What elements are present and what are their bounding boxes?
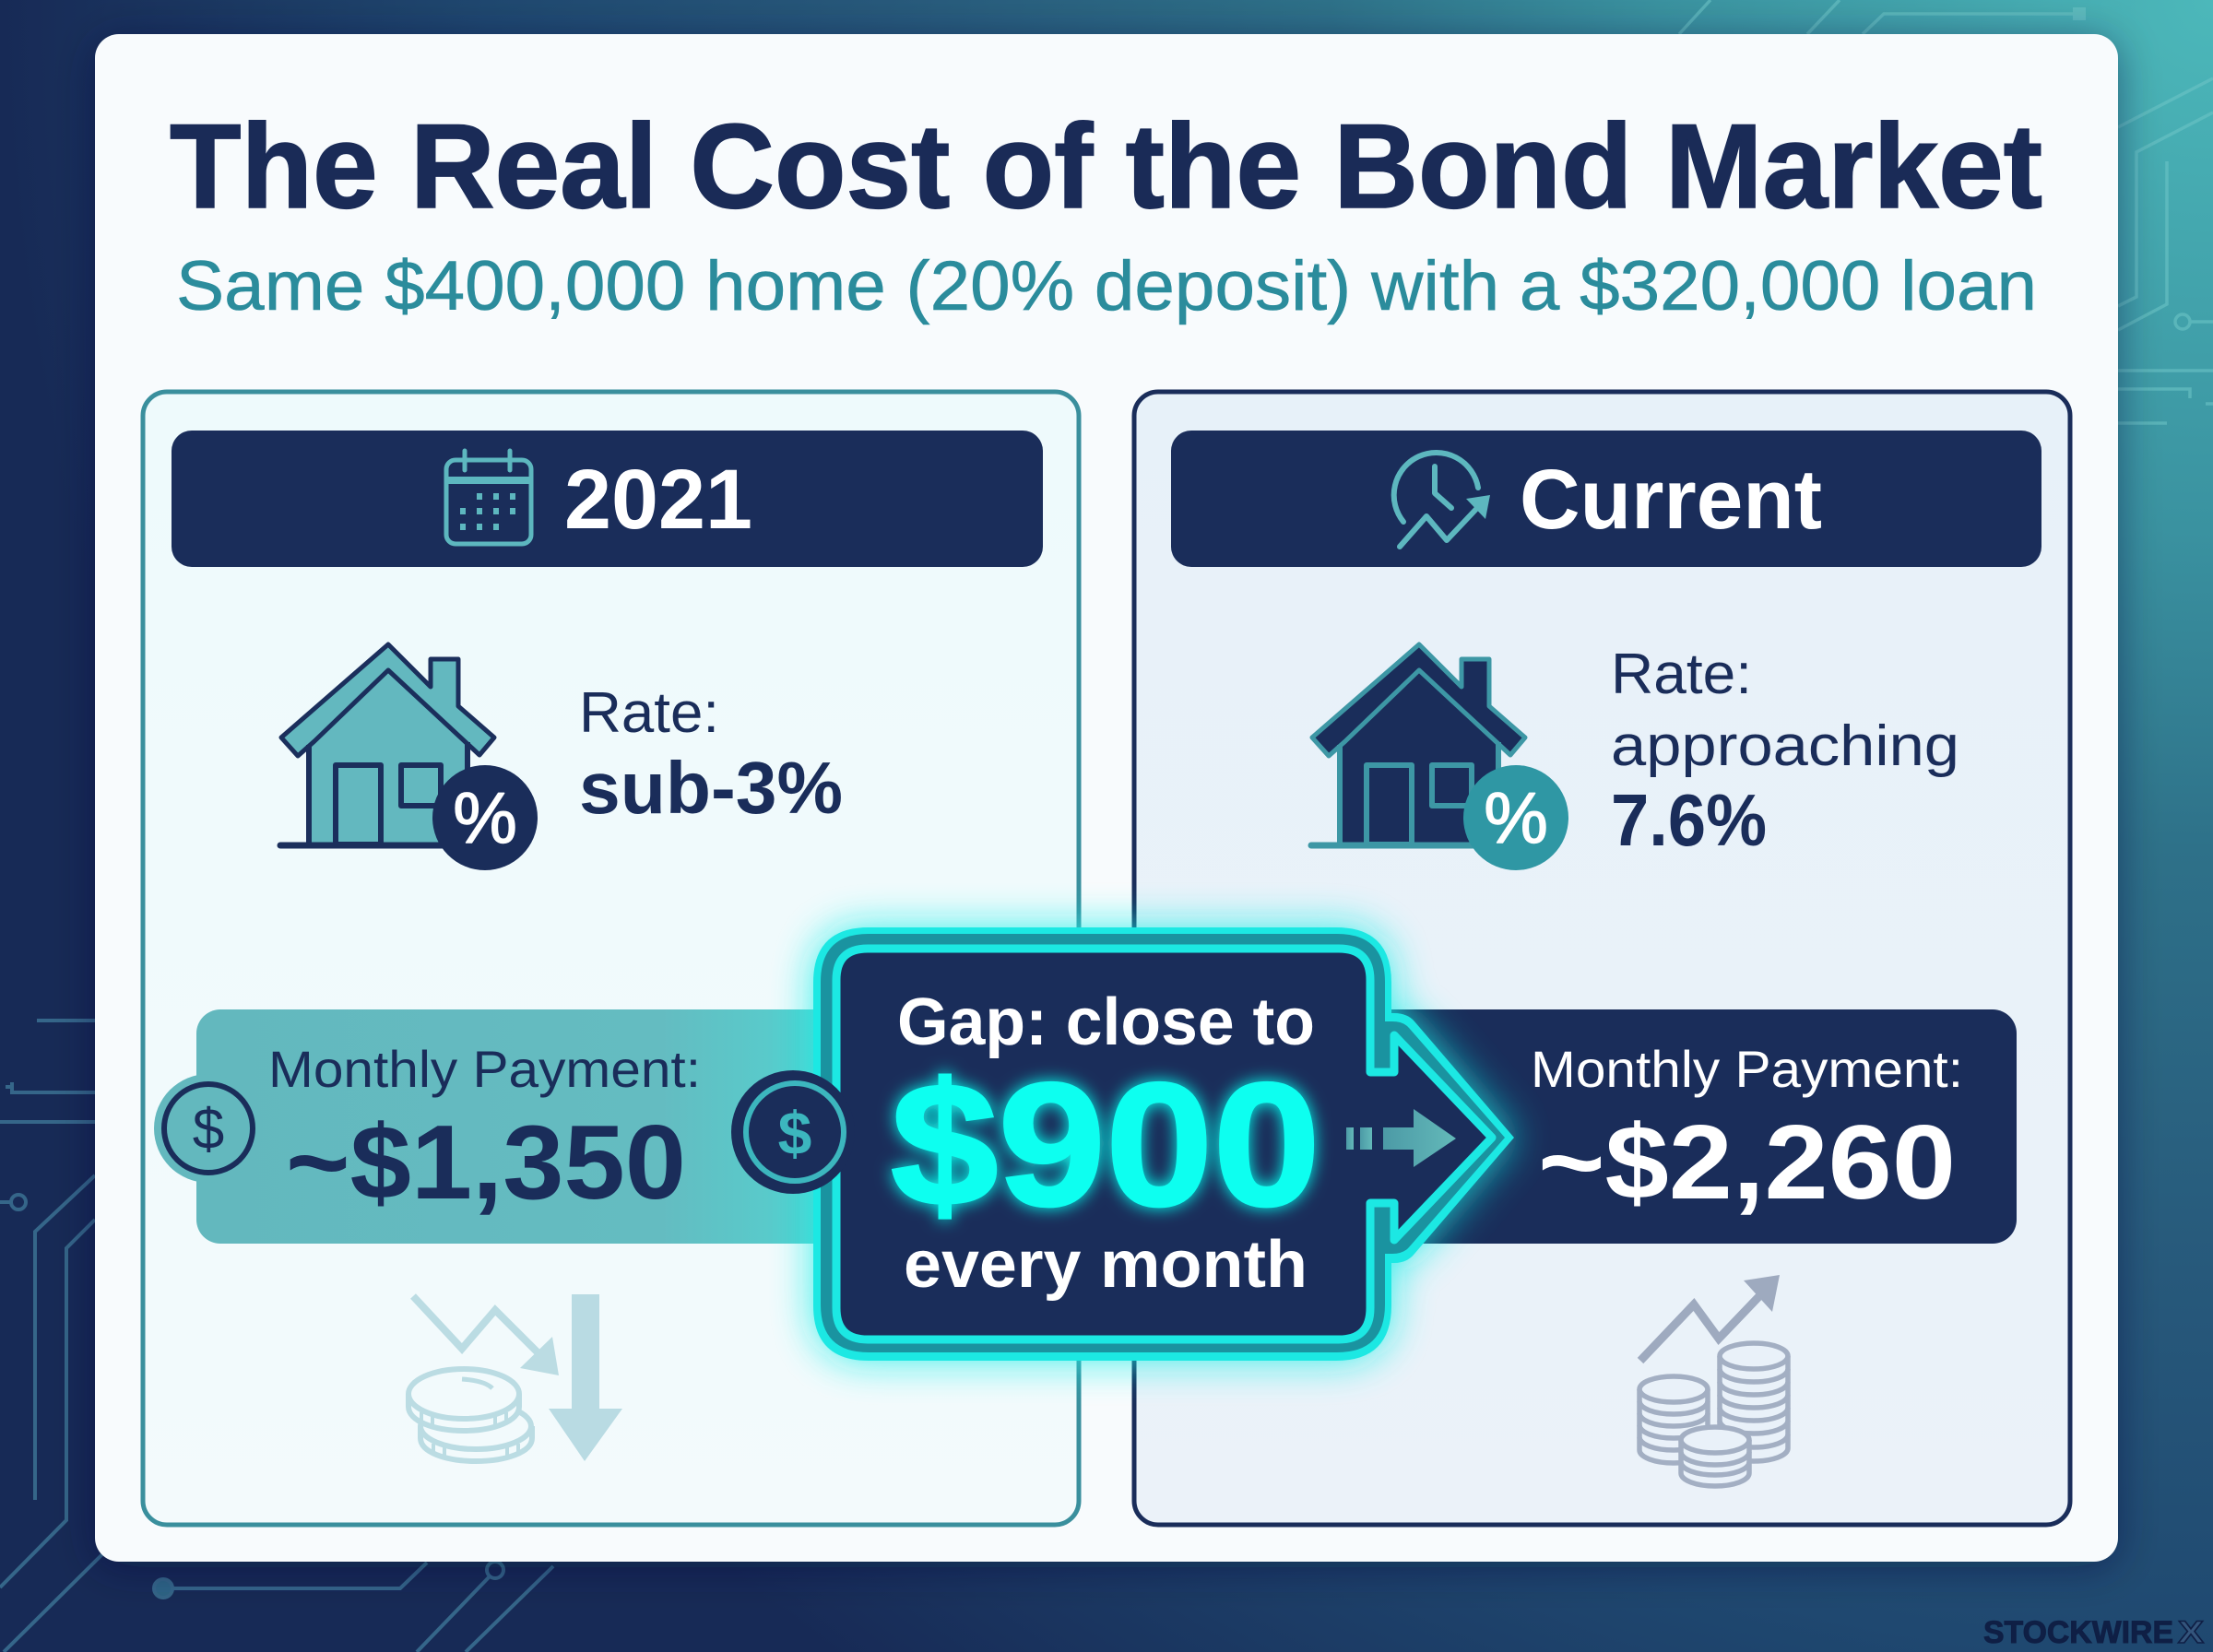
callout footer: every month (904, 1228, 1308, 1302)
rate label Current: Rate: (1611, 643, 1752, 706)
panel: Current (1134, 392, 2070, 1525)
rate value Current: 7.6% (1611, 779, 1767, 861)
callout outer frame (813, 927, 1514, 1361)
rate descriptor Current: approaching (1611, 714, 1959, 778)
rate label 2021: Rate: (579, 681, 719, 745)
callout inner fill (836, 949, 1492, 1339)
watermark (1983, 1615, 2204, 1650)
payment label 2021: Monthly Payment: (268, 1040, 701, 1098)
circuit pattern: top and right (1679, 0, 2213, 423)
icon: house with percent badge: % (453, 777, 517, 858)
icon: dollar tag: $ (193, 1098, 224, 1162)
icon: falling coins (408, 1294, 622, 1461)
payment bar 2021 (196, 1009, 860, 1244)
title: The Real Cost of the Bond Market (170, 99, 2042, 233)
callout amount: $900 (891, 1047, 1320, 1243)
circuit pattern: left and bottom (0, 1021, 553, 1652)
icon: clock with rising arrow (1394, 453, 1490, 547)
icon: rising coin stacks (1639, 1275, 1788, 1486)
icon: dollar tag (154, 1074, 263, 1183)
panel background 2021 (143, 392, 1079, 1525)
icon: house with percent badge (1311, 644, 1568, 870)
icon: dollar coin: $ (778, 1099, 811, 1167)
rate value 2021: sub-3% (579, 747, 843, 829)
header label Current: Current (1520, 453, 1822, 547)
watermark wordmark: STOCKWIRE (1983, 1615, 2173, 1650)
payment value Current: ~$2,260 (1538, 1104, 1956, 1221)
icon: calendar (446, 451, 531, 544)
payment bar Current (1365, 1009, 2017, 1244)
callout: gap arrow box (731, 927, 1514, 1361)
subtitle: Same $400,000 home (20% deposit) with a $320,000 loan (176, 247, 2037, 325)
panel background Current (1134, 392, 2070, 1525)
watermark X mark: X (2178, 1615, 2204, 1650)
icon: dollar coin (731, 1070, 855, 1194)
header bar 2021 (172, 431, 1043, 567)
header bar Current (1171, 431, 2041, 567)
payment label Current: Monthly Payment: (1531, 1040, 1963, 1098)
payment value 2021: ~$1,350 (286, 1104, 686, 1221)
callout heading: Gap: close to (897, 985, 1315, 1059)
callout middle frame (821, 934, 1505, 1352)
icon: house with percent badge (280, 644, 538, 870)
header label 2021: 2021 (564, 453, 752, 547)
icon: small right arrow (1346, 1109, 1456, 1167)
panel: 2021 (143, 392, 1079, 1525)
icon: house with percent badge: % (1484, 777, 1548, 858)
callout glow (813, 927, 1514, 1361)
